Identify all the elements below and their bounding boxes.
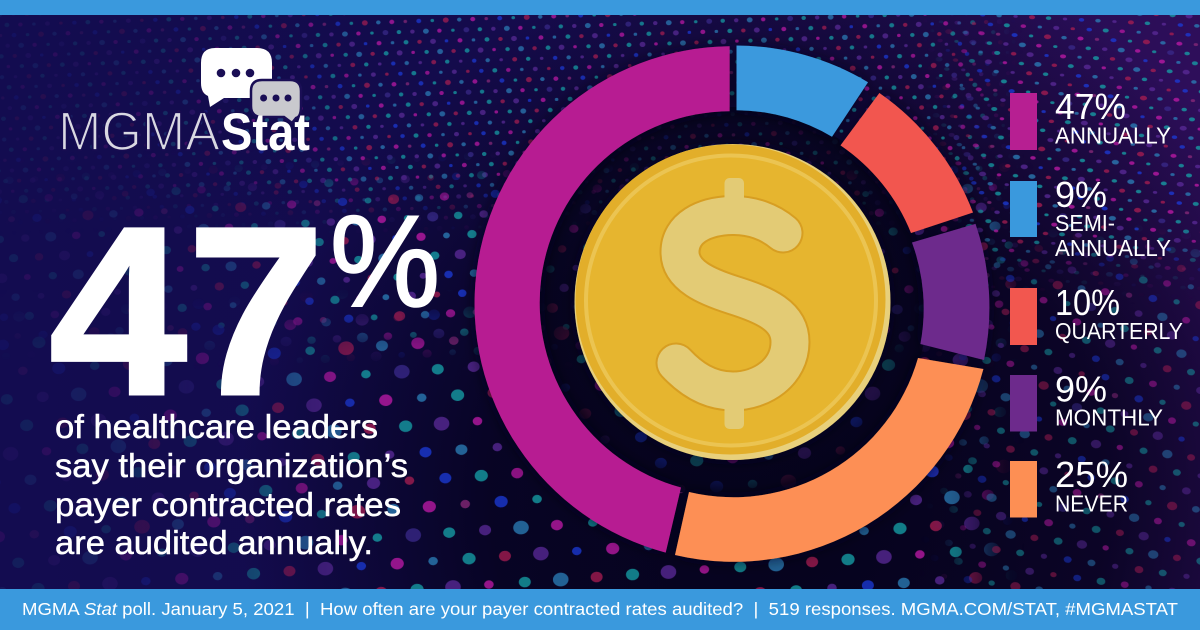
icon: gold dollar coin (574, 144, 890, 460)
big stat: 47% (49, 177, 440, 445)
icon: white speech bubble (201, 48, 272, 107)
description text: payer contracted rates (55, 487, 401, 524)
legend: annually: ANNUALLY (1055, 122, 1171, 148)
legend: annually: 47% (1055, 86, 1126, 127)
segment: monthly 9% (912, 224, 989, 360)
ring hole shading (536, 107, 928, 499)
donut chart (475, 46, 989, 562)
logo: MGMA Stat: Stat (221, 103, 310, 162)
big stat: 47%: % (330, 188, 440, 334)
legend: monthly (1010, 368, 1163, 432)
legend: never: NEVER (1055, 490, 1128, 516)
footer text: MGMA Stat poll. January 5, 2021 | How often are your payer contracted rates audited? | 519 responses. MGMA.COM/STAT, #MGMASTAT (22, 599, 1178, 619)
legend: quarterly: QUARTERLY (1055, 318, 1183, 344)
segment: annually 47% (475, 46, 730, 553)
description text: of healthcare leaders (55, 409, 378, 446)
top bar (0, 0, 1200, 15)
footer bar (0, 589, 1200, 630)
icon: grey speech bubble (251, 80, 301, 123)
legend: semi-annually: SEMI- (1055, 210, 1115, 236)
legend: monthly: 9% (1055, 368, 1107, 410)
legend: quarterly: 10% (1055, 282, 1120, 323)
legend: semi-annually (1010, 174, 1171, 261)
big stat: 47%: 47 (49, 177, 325, 445)
legend: semi-annually: ANNUALLY (1055, 235, 1171, 261)
description text: are audited annually. (55, 525, 373, 562)
description text (55, 409, 408, 562)
logo wordmark: MGMA (58, 100, 220, 162)
legend: semi-annually: 9% (1055, 174, 1107, 215)
segment: never 25% (675, 358, 983, 562)
legend: never: 25% (1055, 454, 1128, 495)
segment: quarterly 10% (840, 93, 973, 233)
legend: never (1010, 454, 1128, 518)
description text: say their organization’s (55, 448, 408, 485)
legend: annually (1010, 86, 1171, 150)
legend (1010, 86, 1183, 518)
legend: quarterly (1010, 282, 1183, 345)
segment: semi-annually 9% (736, 46, 868, 137)
legend: monthly: MONTHLY (1055, 404, 1163, 430)
logo: MGMA Stat (58, 48, 310, 162)
